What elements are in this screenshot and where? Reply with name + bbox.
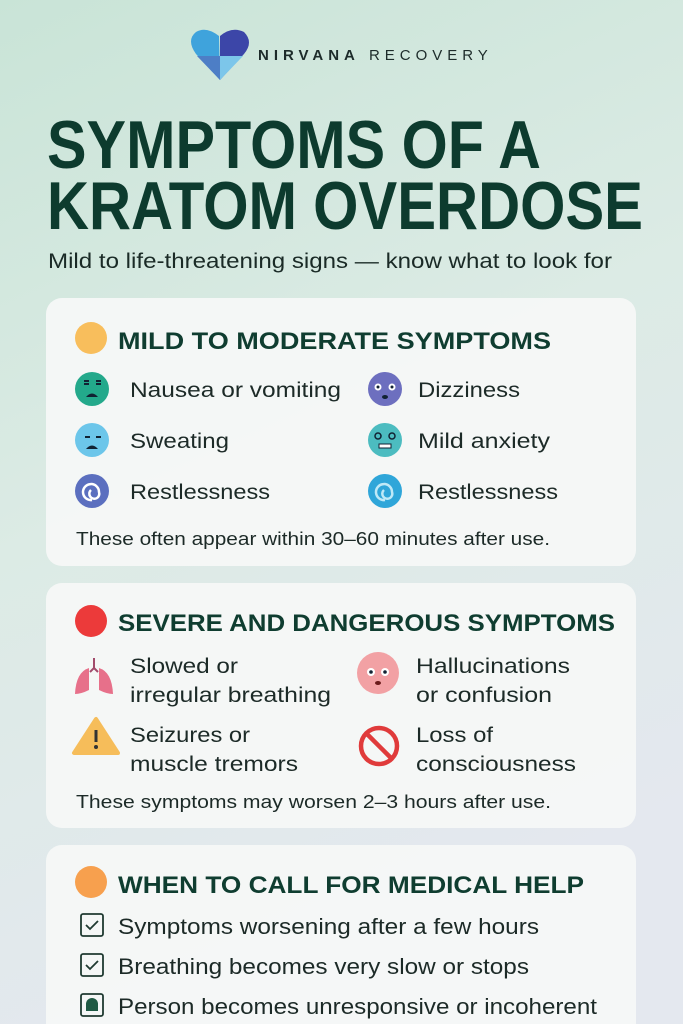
icon: confused face <box>357 652 399 694</box>
icon: nausea face <box>75 372 109 406</box>
icon: red dot <box>75 605 107 637</box>
brand name: NIRVANA RECOVERY <box>258 47 490 64</box>
panel: when to call for medical help <box>46 845 636 1024</box>
symptom list: mild: Restlessness <box>418 481 558 504</box>
heading: severe: SEVERE AND DANGEROUS SYMPTOMS <box>118 610 615 637</box>
symptom list: mild: Mild anxiety <box>418 430 551 453</box>
symptom list: mild: Sweating <box>130 430 229 453</box>
symptom list: severe: Slowed or <box>130 655 238 678</box>
symptom list: severe: Loss of <box>416 724 493 747</box>
icon: anxiety face <box>368 423 402 457</box>
symptom list: mild: Restlessness <box>130 481 270 504</box>
symptom list: severe: or confusion <box>416 684 552 707</box>
icon: yellow dot <box>75 322 107 354</box>
symptom list: severe: muscle tremors <box>130 753 298 776</box>
checklist: Breathing becomes very slow or stops <box>118 954 529 979</box>
checklist: Person becomes unresponsive or incoherent <box>118 994 597 1019</box>
icon: restlessness swirl 1 <box>75 474 109 508</box>
footnote: severe: These symptoms may worsen 2–3 hours after use. <box>76 792 551 812</box>
icon: prohibited <box>361 728 397 764</box>
symptom list: mild <box>130 379 558 504</box>
panel: severe symptoms <box>46 583 636 828</box>
symptom list: mild: Dizziness <box>418 379 520 402</box>
icon: dizzy face <box>368 372 402 406</box>
icon: orange dot <box>75 866 107 898</box>
title <box>47 107 643 244</box>
checklist: Symptoms worsening after a few hours <box>118 914 539 939</box>
logo <box>191 30 490 80</box>
heading: medical help: WHEN TO CALL FOR MEDICAL HELP <box>118 872 584 899</box>
icon: sweating face <box>75 423 109 457</box>
panel: mild to moderate symptoms <box>46 298 636 566</box>
symptom list: severe: Hallucinations <box>416 655 570 678</box>
symptom list: severe: Seizures or <box>130 724 250 747</box>
icon: restlessness swirl 2 <box>368 474 402 508</box>
icon: warning <box>74 719 118 753</box>
symptom list: severe: irregular breathing <box>130 684 331 707</box>
icon: lungs <box>75 658 113 694</box>
symptom list: mild: Nausea or vomiting <box>130 379 341 402</box>
heading: mild: MILD TO MODERATE SYMPTOMS <box>118 328 551 355</box>
subtitle: Mild to life-threatening signs — know what to look for <box>48 250 612 273</box>
title: SYMPTOMS OF A <box>47 107 541 183</box>
icon: heart puzzle <box>191 30 249 80</box>
symptom list: severe <box>130 655 576 776</box>
footnote: mild: These often appear within 30–60 minutes after use. <box>76 529 550 549</box>
symptom list: severe: consciousness <box>416 753 576 776</box>
checklist <box>81 914 597 1019</box>
